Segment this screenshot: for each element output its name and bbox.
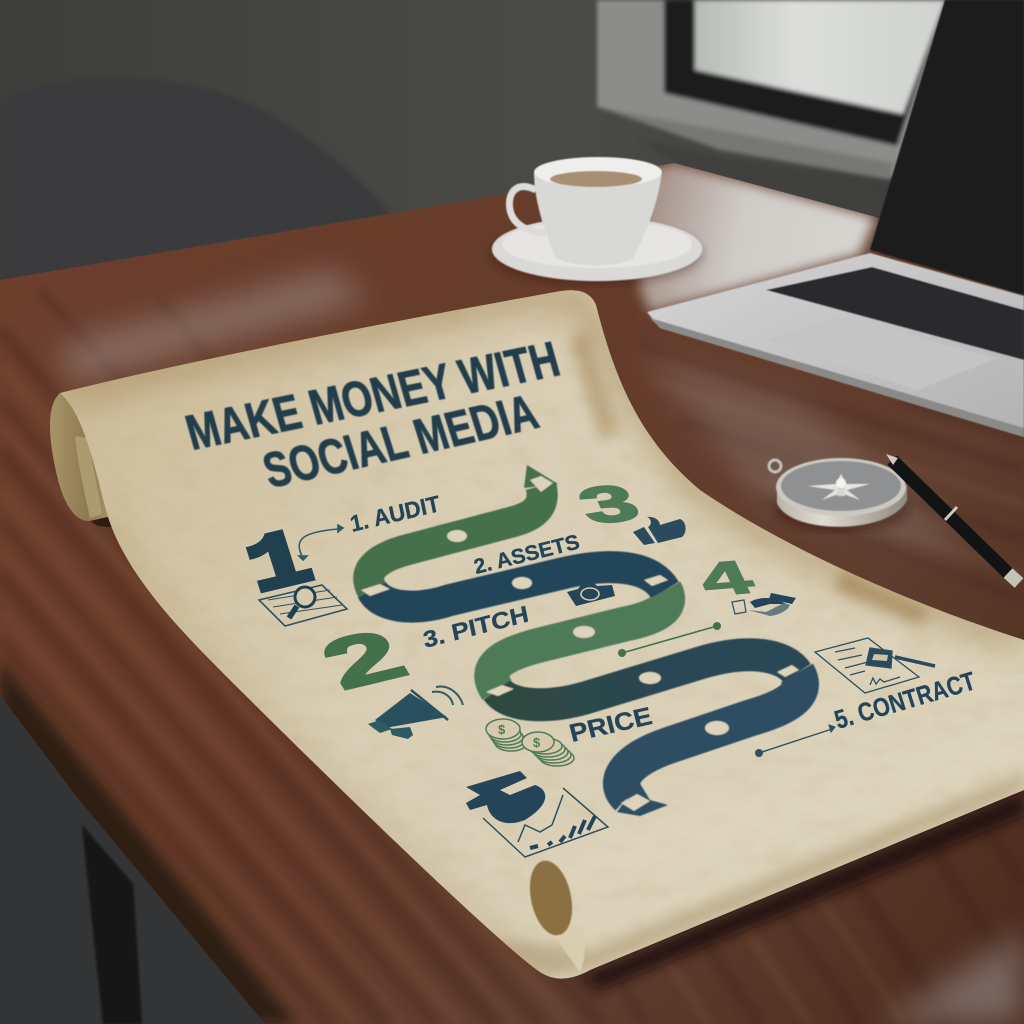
serpentine road (361, 465, 800, 816)
icon: chart with pricing blob (466, 771, 608, 857)
table leg (82, 825, 142, 1024)
paper shadow (580, 792, 1024, 990)
label: price: PRICE (566, 702, 655, 748)
road segment 5 navy (621, 673, 800, 797)
icon: thumbs up (633, 517, 686, 545)
coffee cup and saucer (492, 157, 702, 282)
floor (0, 690, 300, 1024)
icon: camera (567, 583, 615, 606)
scroll bottom roll end (524, 857, 585, 972)
icon: coins (486, 719, 574, 766)
icon: handshake (732, 593, 796, 616)
large numeral 2: 2 (306, 615, 421, 704)
icon: contract with gavel (815, 638, 935, 693)
label: assets: 2. ASSETS (472, 531, 582, 579)
road end taper (617, 782, 668, 816)
arrow head (524, 465, 558, 488)
laptop (647, 0, 1024, 437)
road segment 3 green (492, 590, 668, 690)
chair (0, 78, 392, 282)
pen (886, 454, 1019, 583)
arrow: contract (756, 725, 835, 756)
arrow: audit (299, 525, 343, 560)
window (597, 0, 950, 217)
road segment 1 green (369, 486, 542, 590)
scroll left roll (50, 393, 120, 528)
large numeral 3: 3 (569, 474, 649, 535)
icon: coins: $ (533, 735, 541, 750)
background wall (0, 0, 1024, 300)
title: MAKE MONEY WITH (180, 331, 565, 461)
icon: coins: $ (498, 722, 506, 737)
compass (769, 458, 908, 530)
large numeral 1: 1 (236, 514, 323, 615)
scroll paper (40, 280, 1024, 990)
road markers (361, 476, 799, 811)
road segment 2 navy (372, 567, 665, 607)
title: SOCIAL MEDIA (256, 384, 544, 498)
label: pitch: 3. PITCH (421, 600, 531, 653)
title (180, 331, 565, 498)
large numeral 4: 4 (689, 551, 762, 606)
connector: green (618, 622, 720, 656)
label: contract: 5. CONTRACT (831, 667, 979, 735)
icon: megaphone (368, 686, 463, 739)
icon: document with magnifier (259, 585, 347, 626)
label: audit: 1. AUDIT (348, 490, 442, 537)
road segment 4 dark (497, 655, 797, 705)
